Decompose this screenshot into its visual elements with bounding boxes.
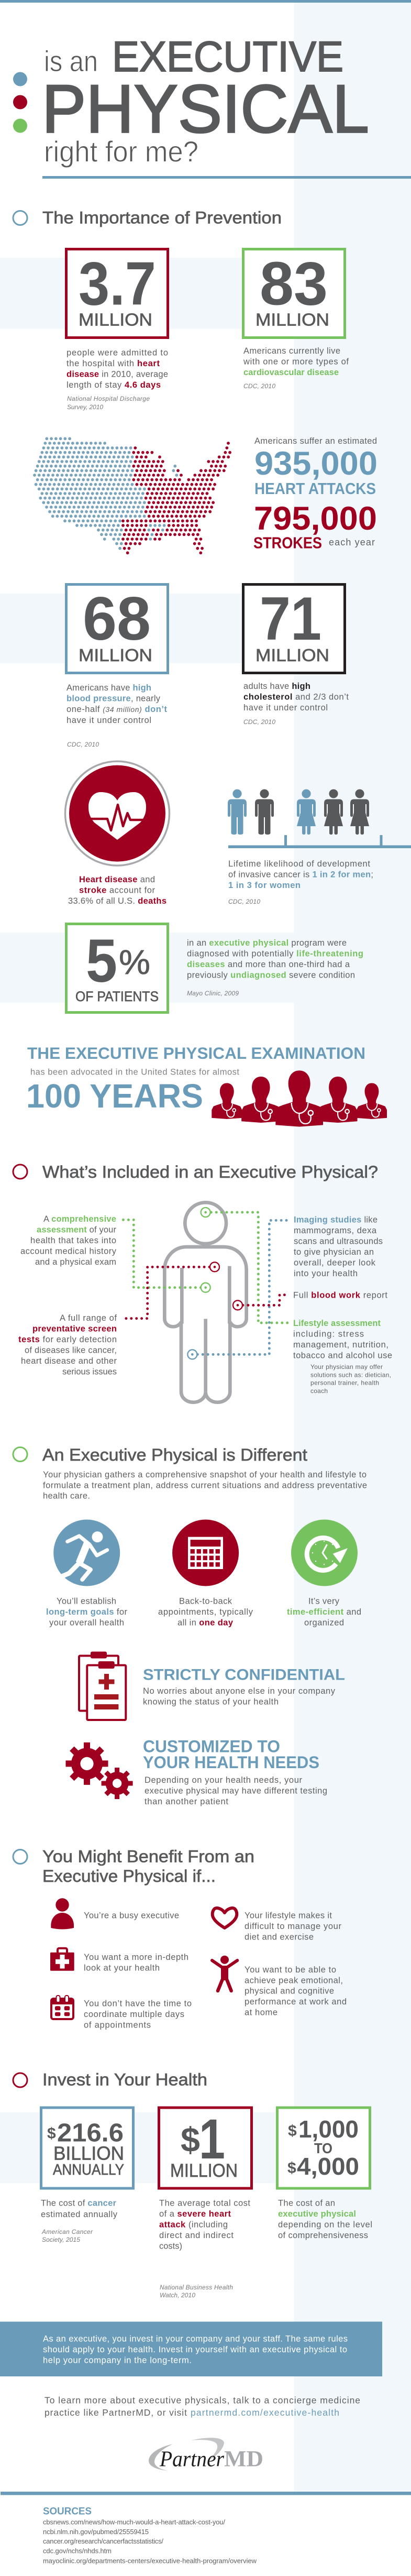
stat panel: 83 million — [243, 249, 349, 390]
benefit: lifestyle: difficult to manage your — [245, 1922, 341, 1931]
stat panel: heart attacks and strokes — [253, 436, 377, 552]
panel: customized — [66, 1737, 327, 1806]
title line: right for me: right for me? — [44, 135, 198, 168]
section heading: You Might Benefit — [13, 1847, 254, 1886]
panel: customized: executive physical may have different testing — [145, 1786, 327, 1796]
intro paragraph: formulate a treatment plan, address current situations and address preventative — [43, 1481, 367, 1490]
icon: clock — [291, 1519, 358, 1586]
stat panel: 68 million: CDC, 2010 — [67, 741, 99, 748]
icon: clipboards — [79, 1651, 126, 1720]
title line: PHYSICAL: PHYSICAL — [42, 70, 369, 147]
cost panel: heart attack: $ — [181, 2120, 200, 2159]
text: comprehensive assessment: account medical history — [20, 1247, 117, 1256]
stat panel: 71 million: MILLION — [256, 645, 329, 665]
stat panel: 83 million: cardiovascular disease — [243, 368, 339, 377]
cost panel: executive physical: The cost of an — [278, 2198, 335, 2208]
callout: 100 years: 100 YEARS — [26, 1077, 203, 1115]
text: preventative screen tests: of diseases like cancer, — [25, 1345, 117, 1355]
title block — [13, 33, 411, 179]
text: preventative screen tests: A full range of — [60, 1313, 117, 1323]
title line: is an: is an — [44, 45, 98, 78]
banner: invest in yourself: As an executive, you invest in your company and your staff. The same rules — [43, 2334, 348, 2344]
panel: heart disease and stroke: 33.6% of all U.S. deaths — [68, 896, 166, 906]
text: imaging studies: Imaging studies like — [294, 1215, 377, 1225]
body diagram — [120, 1202, 289, 1402]
call to action: partnermd.com/executive-health — [191, 2407, 339, 2418]
cost panel: cancer: 216.6 — [57, 2119, 124, 2147]
stat panel: 3.7 million: National Hospital Discharge — [67, 395, 150, 402]
section heading: An Executive Physical is Different: An Executive Physical is Different — [42, 1445, 307, 1464]
stat panel: 68 million: 68 — [83, 584, 151, 653]
benefit: peak performance: physical and cognitive — [245, 1987, 334, 1996]
stat panel: 3.7 million: disease in 2010, average — [66, 370, 168, 379]
panel: strictly confidential: STRICTLY CONFIDENTIAL — [143, 1666, 345, 1684]
text: lifestyle assessment: Lifestyle assessment — [293, 1319, 381, 1328]
cost panel: executive physical: $ — [287, 2160, 296, 2177]
benefit: peak performance: achieve peak emotional, — [245, 1976, 343, 1986]
benefit: peak performance — [212, 1956, 347, 2017]
text: comprehensive assessment: health that takes into — [30, 1236, 116, 1245]
stat panel: 83 million: CDC, 2010 — [243, 382, 275, 390]
text: lifestyle assessment: solutions such as: dietician, — [310, 1372, 391, 1379]
cost panel: cancer: $ — [47, 2125, 56, 2142]
title dots — [13, 72, 27, 133]
panel: customized: CUSTOMIZED TO — [143, 1737, 280, 1756]
cost panel: cancer: Society, 2015 — [42, 2236, 80, 2243]
stat panel: 5% of patients: in an executive physical program were — [187, 938, 347, 948]
cost panel: heart attack: The average total cost — [159, 2198, 250, 2208]
sources: mayoclinic.org/departments-centers/executive-health-program/overview — [43, 2557, 257, 2565]
stat panel: 3.7 million: the hospital with heart — [66, 359, 160, 368]
panel: strictly confidential: knowing the status of your health — [143, 1697, 279, 1707]
benefit: in-depth look — [50, 1948, 188, 1973]
call to action: practice like PartnerMD, or visit — [45, 2407, 187, 2418]
benefit: busy executive: You’re a busy executive — [84, 1911, 179, 1921]
icon: calendar — [172, 1519, 239, 1586]
stat panel: 5% of patients: diseases and more than one-third had a — [187, 960, 350, 969]
panel: customized: Depending on your health needs, your — [145, 1775, 303, 1785]
panel: heart disease and stroke: stroke account for — [79, 885, 155, 895]
text: comprehensive assessment — [20, 1214, 117, 1267]
cost panel: executive physical: 1,000 — [298, 2115, 359, 2143]
section heading: What's Included: What’s Included in an Executive Physical? — [42, 1163, 378, 1181]
stat panel: 5% of patients: Mayo Clinic, 2009 — [187, 990, 239, 997]
text: imaging studies: into your health — [294, 1269, 358, 1278]
stat panel: 68 million: one-half (34 million) don’t — [66, 705, 168, 714]
stat panel: 3.7 million: 3.7 — [79, 249, 156, 317]
feature: long-term goals — [46, 1519, 128, 1627]
feature: one day — [158, 1519, 253, 1627]
cost panel: executive physical: executive physical — [278, 2209, 356, 2219]
stat panel: 83 million: with one or more types of — [243, 357, 349, 367]
benefit: lifestyle: Your lifestyle makes it — [245, 1911, 332, 1921]
text: imaging studies: overall, deeper look — [294, 1258, 376, 1268]
cost panel: heart attack: of a severe heart — [159, 2209, 231, 2219]
stat panel: 3.7 million: people were admitted to — [66, 348, 168, 357]
cost panel: executive physical: of comprehensiveness — [278, 2231, 368, 2240]
text: lifestyle assessment: personal trainer, health — [310, 1379, 379, 1386]
stat panel: 83 million: 83 — [260, 249, 328, 317]
footer rule — [1, 2492, 411, 2495]
map: red dots — [123, 443, 230, 553]
target markers — [187, 1208, 242, 1359]
feature: one day: all in one day — [177, 1618, 234, 1627]
feature: time-efficient: time-efficient and — [287, 1607, 361, 1617]
stat panel: 71 million: have it under control — [243, 703, 328, 712]
cost panel: cancer — [41, 2108, 133, 2243]
cost panel: heart attack: 1 — [199, 2107, 225, 2171]
top bar — [0, 0, 411, 3]
connector dots — [120, 1212, 289, 1354]
stat panel: 71 million: CDC, 2010 — [243, 718, 275, 726]
panel: cancer likelihood: Lifetime likelihood of development — [228, 859, 370, 869]
cost panel: executive physical — [277, 2108, 372, 2240]
stat panel: 5% of patients: OF PATIENTS — [75, 989, 159, 1004]
stat panel: 71 million: cholesterol and 2/3 don’t — [243, 693, 349, 702]
feature: time-efficient — [287, 1519, 361, 1627]
intro paragraph — [43, 1470, 367, 1500]
benefit: lifestyle — [213, 1908, 341, 1942]
stat panel: 5% of patients: 5 — [86, 926, 117, 995]
stat panel: 5% of patients: % — [119, 942, 150, 981]
benefit: no time: coordinate multiple days — [84, 2010, 184, 2019]
dotted US map — [35, 439, 230, 553]
panel: customized: YOUR HEALTH NEEDS — [143, 1753, 319, 1772]
text: lifestyle assessment: Your physician may offer — [310, 1363, 383, 1371]
stat panel: 3.7 million: length of stay 4.6 days — [66, 380, 161, 390]
feature: long-term goals: long-term goals for — [46, 1607, 128, 1617]
cost panel: cancer: estimated annually — [41, 2210, 118, 2219]
sources: SOURCES — [43, 2505, 92, 2517]
feature: long-term goals: You’ll establish — [57, 1597, 116, 1606]
text: comprehensive assessment: A comprehensive — [43, 1214, 116, 1224]
stat panel: 68 million: have it under control — [66, 716, 151, 725]
stat panel: 68 million: Americans have high — [66, 683, 151, 693]
stat panel: 68 million — [66, 584, 168, 748]
sources: cancer.org/research/cancerfactsstatistics/ — [43, 2537, 163, 2545]
text: lifestyle assessment: management, nutrition, — [293, 1340, 388, 1350]
feature: one day: appointments, typically — [158, 1607, 253, 1617]
sources: cbsnews.com/news/how-much-would-a-heart-attack-cost-you/ — [43, 2518, 225, 2526]
title rule — [42, 176, 411, 179]
banner: invest in yourself — [0, 2322, 382, 2376]
stat panel: 71 million: adults have high — [243, 682, 310, 691]
cost panel: heart attack: National Business Health — [160, 2284, 233, 2291]
intro paragraph: health care. — [43, 1491, 90, 1500]
benefit: no time: of appointments — [84, 2020, 151, 2030]
sources: cdc.gov/nchs/nhds.htm — [43, 2547, 112, 2555]
stat panel: heart attacks and strokes: Americans suffer an estimated — [254, 436, 377, 446]
benefit: no time: You don’t have the time to — [84, 1999, 192, 2009]
cost panel: heart attack: Watch, 2010 — [160, 2292, 195, 2299]
icon: raised arms figure — [212, 1956, 237, 1991]
panel: cancer likelihood: of invasive cancer is 1 in 2 for men; — [228, 870, 373, 879]
stat panel: 5% of patients: previously undiagnosed severe condition — [187, 970, 355, 980]
panel: cancer likelihood: CDC, 2010 — [228, 898, 260, 905]
callout: 100 years: THE EXECUTIVE PHYSICAL EXAMINATION — [27, 1044, 365, 1062]
section heading: You Might Benefit: You Might Benefit From an — [42, 1847, 254, 1866]
banner: invest in yourself: should apply to your health. Invest in yourself with an executive physical to — [43, 2345, 347, 2354]
logo: PartnerMD: Partner — [159, 2448, 225, 2472]
text: blood work: Full blood work report — [293, 1291, 387, 1300]
benefit: in-depth look: You want a more in-depth — [84, 1953, 188, 1962]
stat panel: 3.7 million: MILLION — [79, 310, 152, 329]
feature: time-efficient: It’s very — [308, 1597, 340, 1606]
text: comprehensive assessment: and a physical exam — [35, 1257, 116, 1267]
cost panel: heart attack — [159, 2107, 251, 2299]
icon: medical kit — [50, 1948, 74, 1971]
panel: customized: than another patient — [145, 1797, 228, 1806]
icon: heart outline — [213, 1908, 237, 1928]
icon: heart with pulse — [65, 761, 170, 865]
cost panel: heart attack: costs) — [159, 2241, 182, 2251]
cost panel: executive physical: 4,000 — [297, 2153, 359, 2180]
stat panel: 68 million: MILLION — [79, 645, 152, 665]
benefit: peak performance: at home — [245, 2008, 277, 2017]
text: comprehensive assessment: assessment of your — [37, 1225, 116, 1234]
section heading: The Importance of Prevention: The Importance of Prevention — [42, 209, 282, 227]
stat panel: 83 million: MILLION — [256, 310, 329, 329]
cost panel: heart attack: direct and indirect — [159, 2231, 234, 2240]
stat panel: 68 million: blood pressure, nearly — [66, 694, 161, 703]
cost panel: heart attack: MILLION — [170, 2161, 238, 2181]
text: lifestyle assessment — [293, 1319, 392, 1395]
call to action: To learn more about executive physicals, talk to a concierge medicine — [45, 2395, 360, 2406]
logo: PartnerMD — [149, 2438, 263, 2472]
panel: heart disease and stroke — [65, 761, 170, 906]
stat panel: heart attacks and strokes: 935,000 — [254, 445, 377, 482]
likelihood axis — [228, 835, 411, 848]
icon: person — [51, 1898, 74, 1929]
benefit: in-depth look: look at your health — [84, 1964, 160, 1973]
panel: strictly confidential: No worries about anyone else in your company — [143, 1686, 336, 1696]
stat panel: 3.7 million: Survey, 2010 — [67, 403, 103, 411]
stat panel: heart attacks and strokes: each year — [329, 537, 375, 547]
call to action — [45, 2395, 360, 2418]
text: imaging studies: mammograms, dexa — [294, 1226, 377, 1235]
text: preventative screen tests: tests for early detection — [18, 1335, 117, 1344]
stat panel: 5% of patients: diagnosed with potentially life-threatening — [187, 949, 363, 959]
icon: people row — [228, 789, 369, 835]
icon: five doctors — [212, 1070, 387, 1127]
feature: time-efficient: organized — [304, 1618, 344, 1627]
cost panel: cancer: BILLION — [53, 2143, 124, 2164]
text: lifestyle assessment: including: stress — [293, 1330, 364, 1339]
benefit: no time — [51, 1996, 192, 2030]
banner: invest in yourself: help your company in the long-term. — [43, 2355, 192, 2365]
benefit: busy executive — [51, 1898, 179, 1929]
logo: PartnerMD: MD — [224, 2447, 263, 2472]
text: imaging studies — [294, 1215, 383, 1278]
cost panel: cancer: American Cancer — [41, 2228, 93, 2235]
cost panel: executive physical: depending on the level — [278, 2220, 372, 2230]
feature: one day: Back-to-back — [179, 1597, 232, 1606]
stat panel: 5% of patients — [66, 924, 363, 1012]
text: imaging studies: to give physician an — [294, 1247, 374, 1257]
panel: strictly confidential — [79, 1651, 345, 1720]
cost panel: cancer: ANNUALLY — [53, 2162, 124, 2178]
cost panel: heart attack: attack (including — [159, 2220, 228, 2230]
callout: 100 years: has been advocated in the United States for almost — [30, 1068, 239, 1077]
stat panel: heart attacks and strokes: HEART ATTACKS — [254, 479, 376, 498]
text: lifestyle assessment: tobacco and alcohol use — [293, 1351, 392, 1360]
body outline — [164, 1202, 247, 1402]
text: preventative screen tests: preventative screen — [32, 1324, 117, 1334]
cost panel: executive physical: TO — [314, 2140, 332, 2156]
benefit: peak performance: performance at work and — [245, 1997, 347, 2007]
text: preventative screen tests — [18, 1313, 117, 1377]
benefit: peak performance: You want to be able to — [245, 1965, 336, 1975]
panel: cancer likelihood — [228, 789, 411, 905]
icon: appointment calendar — [51, 1996, 73, 2019]
stat panel: heart attacks and strokes: 795,000 — [254, 500, 377, 537]
text: imaging studies: scans and ultrasounds — [294, 1236, 383, 1246]
stat panel: heart attacks and strokes: STROKES — [253, 533, 322, 552]
sources: ncbi.nlm.nih.gov/pubmed/25559415 — [43, 2528, 149, 2536]
panel: heart disease and stroke: Heart disease and — [79, 875, 155, 884]
cost panel: cancer: The cost of cancer — [41, 2198, 117, 2208]
text: lifestyle assessment: coach — [310, 1387, 328, 1395]
intro paragraph: Your physician gathers a comprehensive snapshot of your health and lifestyle to — [43, 1470, 366, 1479]
stat panel: 3.7 million — [66, 249, 168, 411]
text: preventative screen tests: serious issues — [62, 1367, 117, 1377]
title line: EXECUTIVE: EXECUTIVE — [112, 33, 343, 81]
icon: gears — [66, 1742, 133, 1799]
section heading: You Might Benefit: Executive Physical if... — [42, 1867, 216, 1886]
stat panel: 71 million — [243, 584, 349, 726]
callout: 100 years — [26, 1044, 387, 1127]
icon: runner — [53, 1519, 120, 1586]
stat panel: 71 million: 71 — [260, 584, 321, 653]
feature: long-term goals: your overall health — [49, 1618, 124, 1627]
benefit: lifestyle: diet and exercise — [245, 1932, 314, 1942]
section heading: Invest in Your Health: Invest in Your Health — [42, 2070, 207, 2089]
stat panel: 83 million: Americans currently live — [243, 346, 340, 356]
cost panel: executive physical: $ — [288, 2122, 297, 2140]
text: preventative screen tests: heart disease and other — [21, 1356, 117, 1366]
map: blue dots — [35, 439, 176, 549]
panel: cancer likelihood: 1 in 3 for women — [228, 881, 301, 890]
sources — [43, 2505, 257, 2565]
